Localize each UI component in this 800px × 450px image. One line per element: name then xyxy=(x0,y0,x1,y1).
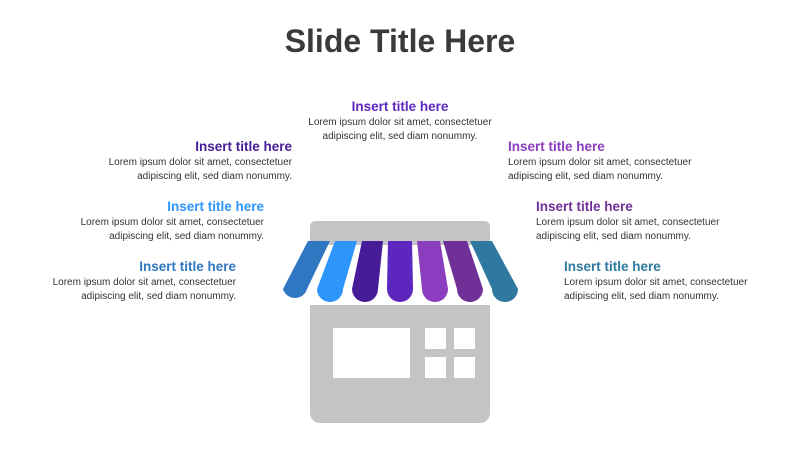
text block: left 2 xyxy=(81,199,264,242)
text block: left 2: Lorem ipsum dolor sit amet, consectetuer xyxy=(81,217,264,228)
text block: right 3: adipiscing elit, sed diam nonummy. xyxy=(564,291,719,302)
text block: left 3: Lorem ipsum dolor sit amet, consectetuer xyxy=(53,277,236,288)
text block: right 1 xyxy=(508,139,692,182)
title: Slide Title Here xyxy=(285,23,515,59)
text block: right 1: Lorem ipsum dolor sit amet, consectetuer xyxy=(508,157,691,168)
text block: right 1: adipiscing elit, sed diam nonummy. xyxy=(508,171,663,182)
text block: left 3: Insert title here xyxy=(139,259,236,274)
text block: left 1: Lorem ipsum dolor sit amet, consectetuer xyxy=(109,157,292,168)
text block: left 3 xyxy=(53,259,236,302)
text block: right 3: Insert title here xyxy=(564,259,661,274)
text block: left 2: adipiscing elit, sed diam nonummy. xyxy=(109,231,264,242)
text block: right 2: Insert title here xyxy=(536,199,633,214)
text block: right 2: adipiscing elit, sed diam nonummy. xyxy=(536,231,691,242)
text block: top center: Lorem ipsum dolor sit amet, consectetuer xyxy=(308,117,492,128)
text block: left 1: Insert title here xyxy=(195,139,292,154)
text block: left 1 xyxy=(109,139,292,182)
text block: right 3 xyxy=(564,259,748,302)
text block: top center xyxy=(308,99,492,142)
text block: right 3: Lorem ipsum dolor sit amet, consectetuer xyxy=(564,277,747,288)
text block: right 2 xyxy=(536,199,720,242)
text block: left 1: adipiscing elit, sed diam nonummy. xyxy=(137,171,292,182)
text block: left 2: Insert title here xyxy=(167,199,264,214)
text block: left 3: adipiscing elit, sed diam nonummy. xyxy=(81,291,236,302)
text block: right 1: Insert title here xyxy=(508,139,605,154)
text block: top center: adipiscing elit, sed diam nonummy. xyxy=(323,131,477,142)
text block: top center: Insert title here xyxy=(352,99,448,114)
text block: right 2: Lorem ipsum dolor sit amet, consectetuer xyxy=(536,217,719,228)
